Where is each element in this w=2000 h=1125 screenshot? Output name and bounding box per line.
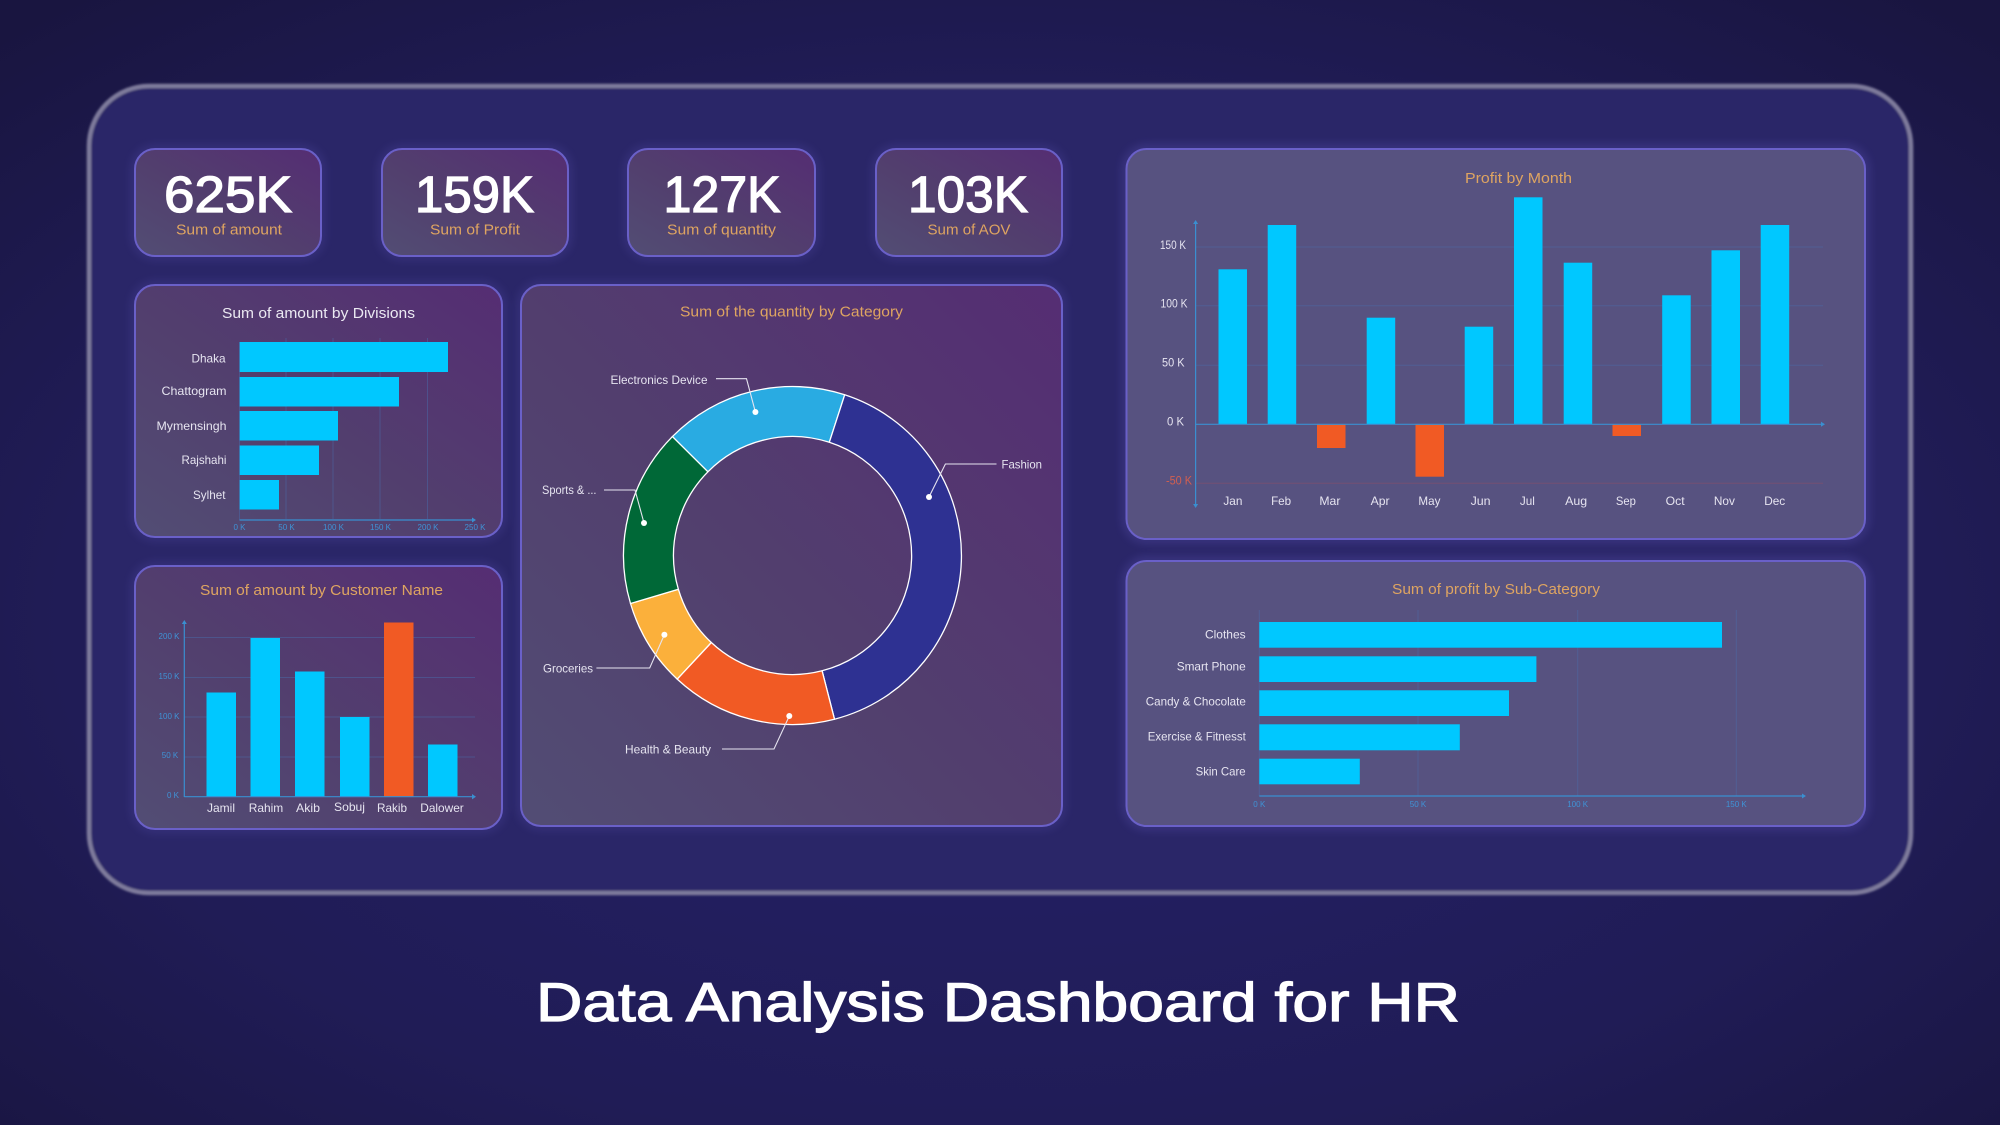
bar chart: monthly profit: Feb [1271, 494, 1291, 508]
bar chart: divisions: 200 K [418, 523, 439, 532]
bar chart: divisions: 50 K [278, 523, 295, 532]
panel: sum of profit KPI: Sum of Profit [430, 222, 520, 238]
bar chart: monthly profit: Jun [1471, 494, 1491, 508]
bar chart: sub-category [1146, 610, 1806, 809]
panel: sum of AOV KPI: Sum of AOV [928, 222, 1011, 238]
heading: sub-category: Sum of profit by Sub-Category [1392, 582, 1601, 598]
callout: groceries: Groceries [543, 662, 593, 676]
callout: electronics device: Electronics Device [610, 373, 708, 387]
bar chart: divisions: 150 K [370, 523, 392, 532]
heading: divisions: Sum of amount by Divisions [222, 306, 415, 322]
callout: fashion: Fashion [1002, 458, 1042, 472]
bar chart: divisions: Chattogram [162, 384, 226, 398]
bar chart: customers: Akib [296, 801, 320, 815]
bar chart: divisions: Sylhet [193, 488, 226, 502]
panel: sum of amount by divisions [135, 285, 502, 537]
bar chart: divisions: Rajshahi [182, 453, 226, 467]
bar chart: sub-category: 150 K [1726, 800, 1747, 809]
bar chart: customers: 100 K [159, 712, 180, 721]
callout: health and beauty: Health & Beauty [625, 742, 711, 756]
bar chart: customers: 50 K [162, 751, 179, 760]
bar chart: monthly profit: Nov [1714, 494, 1735, 508]
main dashboard panel [89, 86, 1911, 893]
bar chart: monthly profit: Oct [1666, 494, 1685, 508]
bar chart: monthly profit: May [1418, 494, 1440, 508]
bar chart: divisions [156, 338, 486, 532]
panel: sum of profit by sub-category [1126, 561, 1865, 826]
bar chart: monthly profit: 100 K [1160, 298, 1188, 310]
callout: sports: Sports & ... [542, 483, 596, 497]
title: Data Analysis Dashboard for HR [536, 971, 1460, 1033]
bar chart: sub-category: Clothes [1205, 628, 1246, 642]
bar chart: customers: Sobuj [334, 800, 365, 814]
panel: sum of profit KPI: 159K [415, 166, 534, 223]
callout: health and beauty [625, 713, 792, 756]
bar chart: sub-category: 50 K [1410, 800, 1427, 809]
bar chart: monthly profit: Apr [1371, 494, 1390, 508]
panel: sum of profit KPI [382, 149, 568, 256]
bar chart: sub-category: Skin Care [1196, 764, 1246, 778]
heading: profit by month: Profit by Month [1465, 171, 1572, 187]
heading: customer name: Sum of amount by Customer Name [200, 583, 443, 599]
panel: sum of amount KPI: 625K [164, 166, 292, 223]
bar chart: monthly profit: Aug [1565, 494, 1587, 508]
heading: category: Sum of the quantity by Category [680, 304, 904, 320]
bar chart: monthly profit: Jan [1223, 494, 1242, 508]
panel: sum of AOV KPI: 103K [908, 166, 1028, 223]
bar chart: customers: 200 K [159, 632, 180, 641]
bar chart: divisions: Dhaka [192, 352, 226, 366]
donut chart: category [624, 387, 961, 725]
panel: sum of quantity KPI [628, 149, 815, 256]
bar chart: monthly profit: Dec [1764, 494, 1785, 508]
callout: fashion [926, 458, 1042, 500]
bar chart: customers: 150 K [159, 672, 180, 681]
panel: sum of amount KPI [135, 149, 321, 256]
callout: sports [542, 483, 647, 526]
bar chart: monthly profit: Sep [1616, 494, 1636, 508]
bar chart: monthly profit: 0 K [1167, 416, 1184, 428]
panel: sum of quantity KPI: Sum of quantity [667, 222, 777, 238]
bar chart: divisions: 100 K [323, 523, 345, 532]
bar chart: sub-category: Exercise & Fitnesst [1148, 730, 1246, 744]
bar chart: customers: Jamil [207, 801, 235, 815]
bar chart: customers: Dalower [420, 801, 464, 815]
bar chart: divisions: 0 K [233, 523, 246, 532]
bar chart: monthly profit: Mar [1319, 494, 1340, 508]
callout: electronics device [610, 373, 758, 415]
bar chart: customers: Rahim [249, 801, 283, 815]
bar chart: monthly profit: 50 K [1162, 358, 1185, 370]
bar chart: customers: 0 K [167, 791, 180, 800]
bar chart: monthly profit: 150 K [1160, 240, 1186, 252]
bar chart: sub-category: Smart Phone [1177, 660, 1246, 674]
bar chart: divisions: 250 K [465, 523, 486, 532]
bar chart: monthly profit [1160, 197, 1825, 508]
bar chart: sub-category: 0 K [1253, 800, 1266, 809]
bar chart: divisions: Mymensingh [156, 419, 226, 433]
panel: sum of amount KPI: Sum of amount [176, 222, 282, 238]
bar chart: monthly profit: Jul [1520, 494, 1535, 508]
bar chart: customers: Rakib [377, 801, 407, 815]
panel: sum of quantity KPI: 127K [664, 166, 780, 223]
bar chart: sub-category: 100 K [1567, 800, 1589, 809]
panel: sum of the quantity by category [521, 285, 1062, 826]
panel: sum of AOV KPI [876, 149, 1062, 256]
panel: profit by month [1126, 149, 1865, 539]
panel: sum of amount by customer name [135, 566, 502, 829]
bar chart: customers [159, 620, 476, 815]
bar chart: monthly profit: -50 K [1166, 476, 1192, 488]
bar chart: sub-category: Candy & Chocolate [1146, 694, 1246, 708]
callout: groceries [543, 632, 667, 676]
